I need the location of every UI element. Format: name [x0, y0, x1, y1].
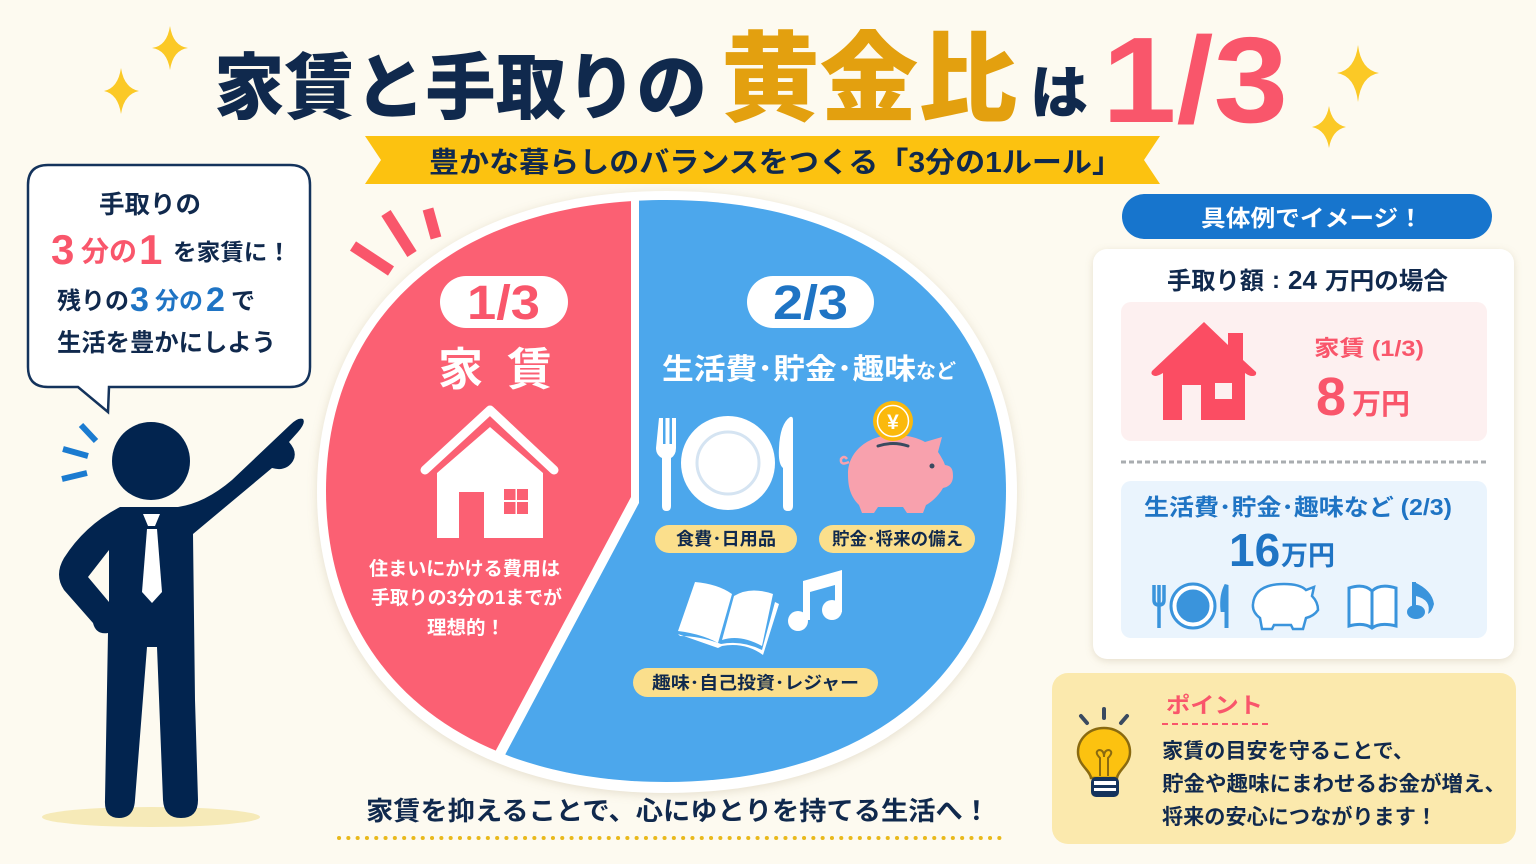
icon: light bulb	[1078, 709, 1130, 797]
panel: point callout	[1052, 673, 1516, 844]
living example card: 16	[1229, 524, 1280, 576]
title: は	[1030, 61, 1088, 126]
speech bubble: 3	[51, 226, 74, 273]
tag: hobbies: 趣味･自己投資･レジャー	[652, 673, 859, 693]
title: 家賃と手取りの	[214, 49, 707, 129]
living slice label: 生活費･貯金･趣味	[662, 353, 916, 386]
example pill heading	[1122, 194, 1492, 239]
figure: man pointing	[42, 419, 304, 827]
speech bubble: 生活を豊かにしよう	[57, 329, 276, 357]
tag: food: 食費･日用品	[676, 529, 776, 549]
accent lines near pie	[353, 209, 436, 271]
living slice label: など	[916, 360, 956, 383]
panel: point callout: 貯金や趣味にまわせるお金が増え、	[1162, 772, 1506, 796]
subtitle ribbon: 豊かな暮らしのバランスをつくる「3分の1ルール」	[429, 147, 1122, 179]
panel: concrete example: 万円の場合	[1325, 268, 1448, 295]
icon: plate and cutlery	[656, 416, 793, 511]
title	[214, 12, 1288, 148]
rent example card: 家賃 (1/3)	[1314, 336, 1424, 361]
icon: white house	[425, 410, 554, 538]
speech bubble: 手取りの	[99, 191, 201, 219]
panel: point callout: ポイント	[1166, 693, 1263, 718]
title: 黄金比	[721, 24, 1017, 134]
speech bubble: を家賃に！	[173, 239, 291, 265]
title: 1/3	[1102, 12, 1288, 148]
panel: concrete example: :	[1272, 267, 1280, 294]
icon: piggy bank: ¥	[887, 411, 899, 434]
tag: food	[655, 525, 797, 553]
rent example card	[1121, 302, 1487, 441]
living example card	[1121, 481, 1487, 638]
speech bubble: 残りの	[57, 287, 129, 315]
subtitle ribbon	[365, 136, 1160, 184]
rent slice label: 1/3	[467, 277, 540, 330]
rent slice label: 家	[438, 344, 483, 395]
slice: rent 1/3	[326, 201, 631, 751]
rent description	[369, 558, 562, 639]
living example card: 生活費･貯金･趣味など (2/3)	[1144, 494, 1452, 520]
living slice label	[662, 276, 956, 386]
rent description: 住まいにかける費用は	[369, 558, 560, 580]
rent slice label: 賃	[507, 344, 552, 395]
icon: sparkles	[104, 26, 1379, 148]
icon: book and music note	[678, 570, 842, 655]
panel: point callout: 家賃の目安を守ることで、	[1162, 740, 1414, 763]
living example card: 万円	[1281, 541, 1335, 571]
rent example card: 8	[1316, 367, 1346, 427]
rent description: 手取りの3分の1までが	[371, 586, 562, 609]
accent lines near figure	[62, 425, 96, 479]
slice: living 2/3	[505, 200, 1006, 782]
speech bubble: 1	[139, 226, 162, 273]
speech bubble	[28, 165, 310, 412]
caption under pie: 家賃を抑えることで、心にゆとりを持てる生活へ！	[366, 796, 990, 826]
speech bubble: 3	[130, 281, 149, 319]
blue icons	[1154, 582, 1434, 629]
panel: concrete example: 手取り額	[1167, 268, 1264, 295]
tag: hobbies	[633, 668, 878, 697]
rent description: 理想的！	[427, 617, 505, 639]
rent slice label	[438, 276, 568, 395]
speech bubble: 分の	[155, 288, 203, 315]
rent example card: 万円	[1352, 389, 1410, 421]
icon: piggy bank	[841, 401, 953, 513]
pie chart	[317, 191, 1017, 793]
tag: savings	[819, 525, 975, 553]
speech bubble: 2	[206, 281, 225, 319]
speech bubble: で	[231, 288, 255, 315]
speech bubble: 分の	[81, 236, 137, 267]
panel: concrete example: 24	[1288, 265, 1317, 295]
tag: savings: 貯金･将来の備え	[832, 529, 963, 549]
panel: point callout: 将来の安心につながります！	[1162, 805, 1437, 829]
panel: concrete example	[1093, 249, 1514, 659]
example pill heading: 具体例でイメージ！	[1201, 205, 1423, 231]
living slice label: 2/3	[773, 277, 848, 330]
